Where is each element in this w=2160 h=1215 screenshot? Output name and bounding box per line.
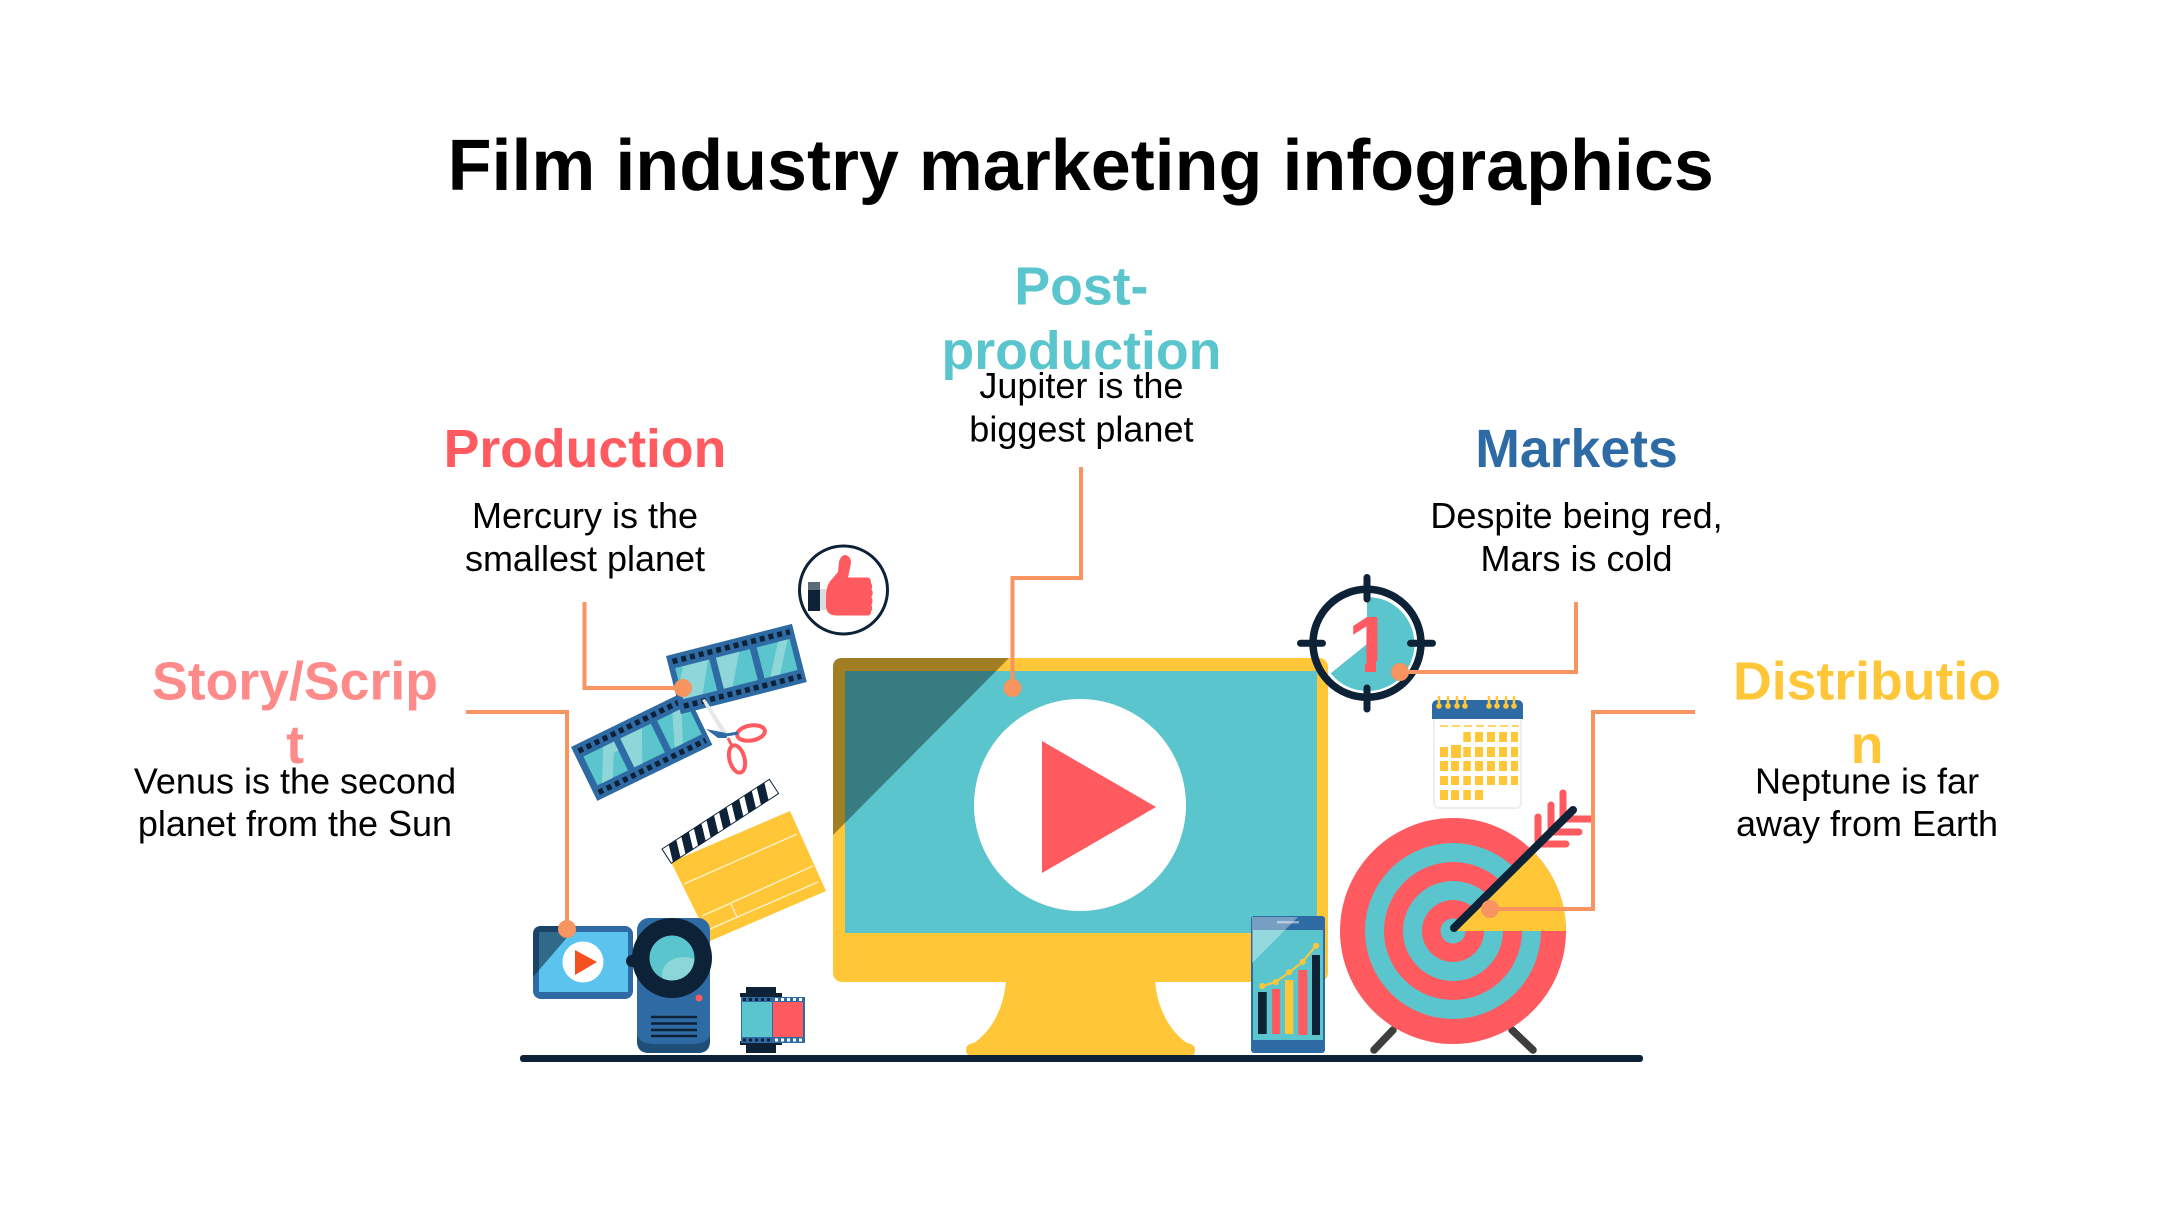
text block: markets bbox=[1430, 419, 1723, 579]
text block: distribution: n bbox=[1851, 715, 1883, 775]
text block: markets: Markets bbox=[1475, 419, 1678, 479]
text block: markets: Despite being red, bbox=[1430, 495, 1723, 536]
connector: story/script bbox=[466, 712, 576, 938]
icon: film strip lower bbox=[571, 691, 712, 801]
icon: target with arrow bbox=[1340, 793, 1591, 1050]
icon: clapperboard bbox=[662, 779, 826, 941]
text block: production: Mercury is the bbox=[472, 495, 698, 536]
text block: production: smallest planet bbox=[465, 538, 705, 579]
text block: production bbox=[444, 419, 726, 579]
text block: markets: Mars is cold bbox=[1480, 538, 1673, 579]
text block: post-production: biggest planet bbox=[969, 408, 1193, 450]
icon: smartphone with bar chart bbox=[1251, 916, 1325, 1053]
connector: post-production bbox=[1004, 467, 1081, 697]
icon: film canister bbox=[740, 987, 805, 1053]
illustration: film production scene bbox=[520, 546, 1643, 1062]
text block: story/script: Story/Scrip bbox=[152, 652, 438, 712]
icon: scissors bbox=[702, 699, 766, 774]
connector: distribution bbox=[1481, 712, 1695, 918]
text block: production: Production bbox=[444, 419, 726, 479]
text block: story/script: t bbox=[286, 715, 304, 775]
text block: story/script: Venus is the second bbox=[134, 760, 456, 802]
icon: stopwatch crosshair bbox=[1300, 578, 1432, 709]
icon: film camera bbox=[626, 918, 712, 1053]
text block: story/script bbox=[134, 652, 456, 844]
connector: production bbox=[584, 602, 692, 697]
text block: distribution bbox=[1733, 652, 2001, 844]
icon: calendar bbox=[1432, 697, 1523, 808]
icon: thumbs up badge bbox=[800, 546, 888, 634]
icon: film strip upper bbox=[666, 624, 807, 714]
icon: desktop monitor with play button bbox=[833, 658, 1328, 1056]
text block: post-production bbox=[941, 256, 1221, 450]
text block: post-production: Jupiter is the bbox=[979, 365, 1183, 406]
text block: post-production: Post- bbox=[1014, 256, 1148, 316]
connector: markets bbox=[1391, 602, 1576, 681]
text block: distribution: away from Earth bbox=[1736, 803, 1998, 844]
title: Film industry marketing infographics bbox=[448, 126, 1714, 206]
text block: distribution: Distributio bbox=[1733, 652, 2001, 712]
text block: distribution: Neptune is far bbox=[1755, 760, 1979, 802]
icon: stopwatch crosshair: 1 bbox=[1348, 600, 1392, 689]
floor line bbox=[520, 1055, 1643, 1062]
text block: story/script: planet from the Sun bbox=[138, 803, 452, 844]
icon: small video player bbox=[533, 926, 633, 999]
text block: post-production: production bbox=[941, 321, 1221, 381]
